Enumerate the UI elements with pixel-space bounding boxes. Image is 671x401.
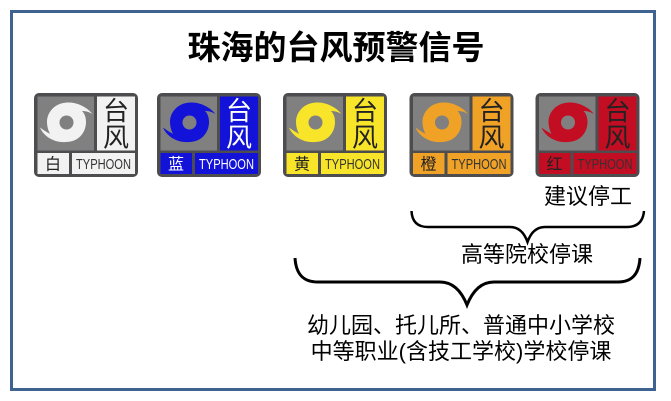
icon: red typhoon signal <box>536 93 640 177</box>
icon: yellow typhoon signal: 台 <box>352 96 378 126</box>
icon: white typhoon signal <box>34 93 138 177</box>
brace: orange and red signals <box>412 211 644 242</box>
icon: white typhoon signal: 风 <box>103 122 129 152</box>
icon: orange typhoon signal: TYPHOON <box>452 156 506 173</box>
icon: red typhoon signal: 风 <box>604 122 631 152</box>
label: kindergartens and schools suspend classes: 幼儿园、托儿所、普通中小学校 <box>307 313 615 338</box>
icon: orange typhoon signal: 风 <box>478 122 505 152</box>
icon: orange typhoon signal: 橙 <box>420 156 437 174</box>
icon: white typhoon signal: TYPHOON <box>76 156 131 173</box>
icon: red typhoon signal: TYPHOON <box>578 156 632 173</box>
icon: white typhoon signal: 台 <box>103 96 129 126</box>
label: work suspension advised: 建议停工 <box>544 184 632 209</box>
label: kindergartens and schools suspend classes <box>307 313 615 364</box>
label: universities suspend classes: 高等院校停课 <box>461 242 593 267</box>
icon: yellow typhoon signal: 黄 <box>294 156 310 174</box>
icon: blue typhoon signal: 蓝 <box>168 156 184 174</box>
icon: blue typhoon signal <box>157 93 261 177</box>
icon: yellow typhoon signal: 风 <box>352 122 378 152</box>
icon: blue typhoon signal: 台 <box>226 96 252 126</box>
icon: red typhoon signal: 红 <box>546 156 563 174</box>
brace: yellow to red signals <box>295 258 640 305</box>
icon: white typhoon signal: 白 <box>45 156 61 174</box>
icon: red typhoon signal: 台 <box>604 96 631 126</box>
label: kindergartens and schools suspend classes: 中等职业(含技工学校)学校停课 <box>311 339 611 364</box>
icon: yellow typhoon signal: TYPHOON <box>325 156 380 173</box>
icon: blue typhoon signal: TYPHOON <box>199 156 254 173</box>
icon: yellow typhoon signal <box>283 93 387 177</box>
icon: orange typhoon signal <box>410 93 514 177</box>
icon: orange typhoon signal: 台 <box>478 96 505 126</box>
title: 珠海的台风预警信号 <box>188 29 484 66</box>
icon: blue typhoon signal: 风 <box>226 122 252 152</box>
